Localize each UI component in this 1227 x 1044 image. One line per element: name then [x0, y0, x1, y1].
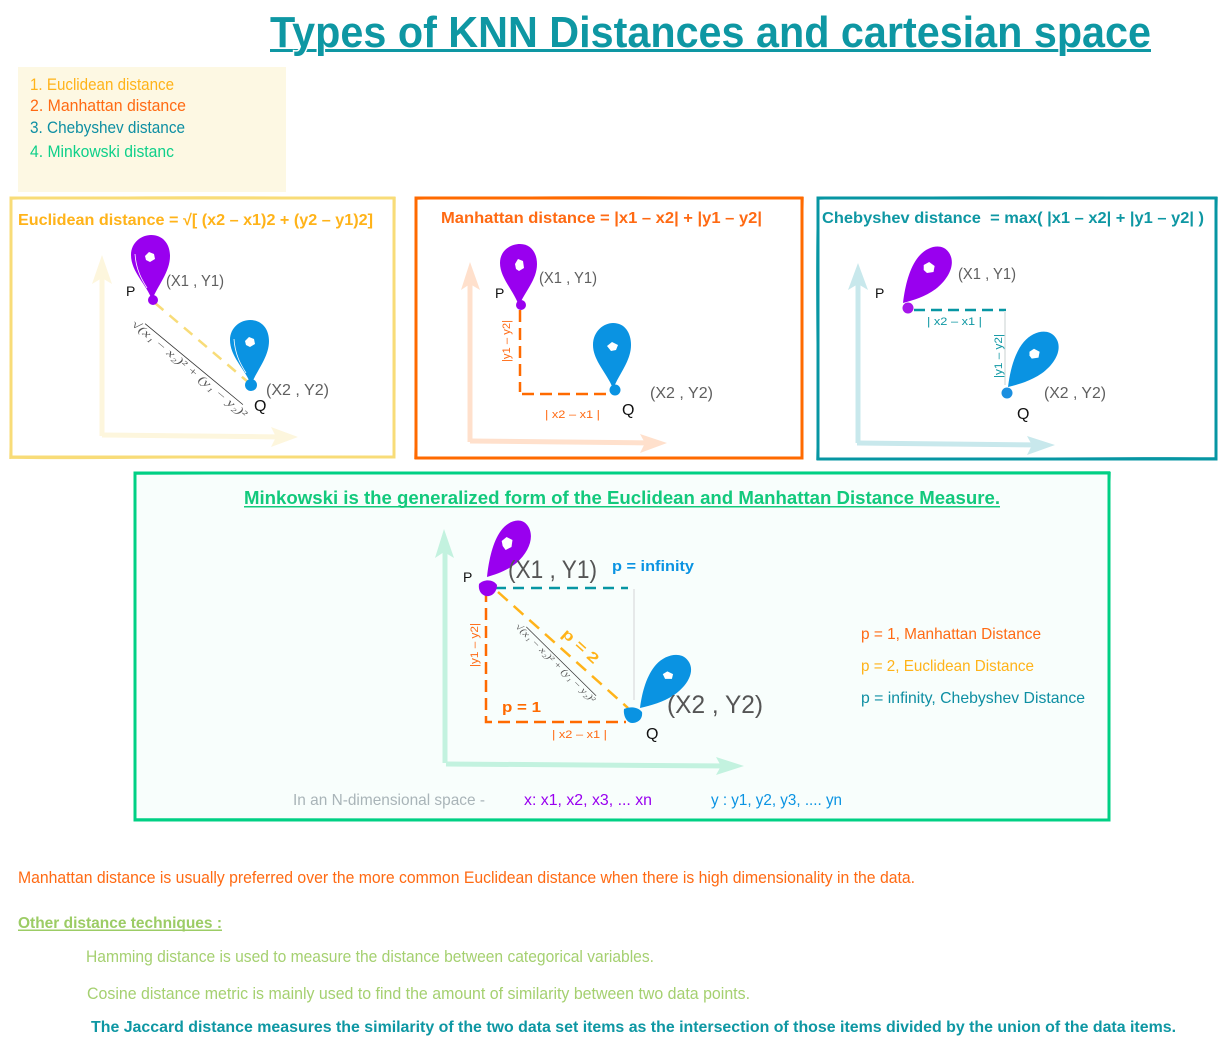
legend of p values: p = infinity, Chebyshev Distance — [861, 690, 1085, 707]
panel: list of distance types: 1. Euclidean distance — [30, 76, 174, 94]
Jaccard text: The Jaccard distance measures the similarity of the two data set items as the intersection of those items divided by the union of the data items. — [91, 1019, 1176, 1036]
segment labels: |y1 – y2| — [469, 623, 481, 667]
point labels — [495, 270, 713, 419]
Minkowski axes — [435, 529, 744, 775]
N-dimensional space note — [293, 792, 842, 809]
N-dimensional space note: In an N-dimensional space - — [293, 792, 485, 809]
Manhattan path lines — [520, 310, 612, 394]
N-dimensional space note: y : y1, y2, y3, .... yn — [711, 792, 842, 809]
point labels — [463, 556, 763, 743]
other techniques heading: Other distance techniques : — [18, 915, 222, 932]
Minkowski lines — [486, 588, 634, 722]
segment labels: | x2 – x1 | — [545, 409, 600, 421]
segment labels — [501, 320, 600, 421]
Q base dot — [624, 707, 642, 723]
Chebyshev lines — [914, 310, 1006, 385]
Chebyshev formula heading: Chebyshev distance = max( |x1 – x2| + |y1 – y2| ) — [822, 210, 1204, 227]
Manhattan note: Manhattan distance is usually preferred over the more common Euclidean distance when there is high dimensionality in the data. — [18, 868, 915, 887]
point labels: P — [875, 285, 884, 301]
N-dimensional space note: x: x1, x2, x3, ... xn — [524, 792, 652, 809]
rotated Minkowski formula: √(x₁ − x₂)² + (y₁ − y₂)² — [514, 621, 598, 705]
point labels: (X1 , Y1) — [539, 270, 597, 287]
segment labels: | x2 – x1 | — [552, 729, 607, 741]
pin P — [500, 244, 537, 310]
Euclidean distance line — [155, 303, 248, 382]
point labels: P — [126, 283, 135, 299]
pin P — [487, 520, 531, 577]
pin P — [903, 246, 952, 303]
legend of p values — [861, 626, 1085, 707]
pin Q — [593, 323, 631, 396]
P base dot — [479, 580, 497, 596]
p labels: p = infinity — [612, 559, 694, 575]
legend of p values: p = 2, Euclidean Distance — [861, 658, 1034, 675]
panel: list of distance types: 2. Manhattan distance — [30, 97, 186, 115]
P base dot — [902, 302, 914, 314]
pin Q — [1008, 332, 1059, 387]
point labels: Q — [1017, 406, 1029, 423]
pin P — [131, 235, 170, 305]
segment labels: | x2 – x1 | — [927, 316, 982, 328]
point labels: (X1 , Y1) — [166, 273, 224, 290]
point labels — [875, 266, 1106, 423]
point labels: Q — [646, 726, 658, 743]
point labels: Q — [622, 402, 634, 419]
pin Q — [640, 655, 691, 708]
p labels — [502, 559, 694, 716]
point labels: Q — [254, 398, 266, 415]
panel: list of distance types: 4. Minkowski distanc — [30, 143, 174, 161]
panel: Minkowski distance — [134, 472, 1110, 821]
Chebyshev axes — [848, 263, 1055, 455]
legend of p values: p = 1, Manhattan Distance — [861, 626, 1041, 643]
panel: list of distance types — [18, 67, 286, 192]
panel: list of distance types: 3. Chebyshev distance — [30, 119, 185, 137]
Hamming text: Hamming distance is used to measure the distance between categorical variables. — [86, 947, 654, 966]
panel: Manhattan distance — [415, 197, 803, 459]
Manhattan formula heading: Manhattan distance = |x1 – x2| + |y1 – y2| — [441, 210, 762, 227]
point labels: P — [463, 569, 472, 585]
rotated Minkowski formula — [514, 621, 598, 705]
segment labels — [927, 316, 1005, 378]
title: Types of KNN Distances and cartesian space — [270, 8, 1151, 57]
point labels: (X2 , Y2) — [1044, 385, 1106, 402]
Manhattan axes — [461, 262, 667, 453]
segment labels: |y1 – y2| — [501, 320, 513, 362]
panel: Euclidean distance — [10, 197, 395, 459]
point labels: (X2 , Y2) — [266, 382, 329, 399]
point labels — [126, 273, 329, 415]
point labels: (X1 , Y1) — [958, 266, 1016, 283]
rotated Euclidean formula: √(x₁ − x₂)² + (y₁ − y₂)² — [129, 318, 250, 421]
Euclidean axes — [92, 255, 298, 447]
pin Q — [230, 320, 269, 391]
Minkowski heading: Minkowski is the generalized form of the Euclidean and Manhattan Distance Measure. — [244, 488, 1000, 508]
panel: Chebyshev distance — [817, 197, 1217, 460]
Cosine text: Cosine distance metric is mainly used to find the amount of similarity between two data points. — [87, 984, 750, 1003]
segment labels — [469, 623, 607, 741]
Euclidean formula heading: Euclidean distance = √[ (x2 – x1)2 + (y2 – y1)2] — [18, 212, 373, 229]
p labels: p = 1 — [502, 700, 541, 716]
point labels: P — [495, 285, 504, 301]
rotated Euclidean formula — [129, 317, 251, 421]
Q base dot — [1002, 388, 1012, 398]
segment labels: |y1 – y2| — [993, 334, 1005, 378]
point labels: (X1 , Y1) — [508, 556, 597, 584]
p labels: p = 2 — [558, 626, 602, 667]
point labels: (X2 , Y2) — [667, 691, 763, 719]
point labels: (X2 , Y2) — [650, 385, 713, 402]
